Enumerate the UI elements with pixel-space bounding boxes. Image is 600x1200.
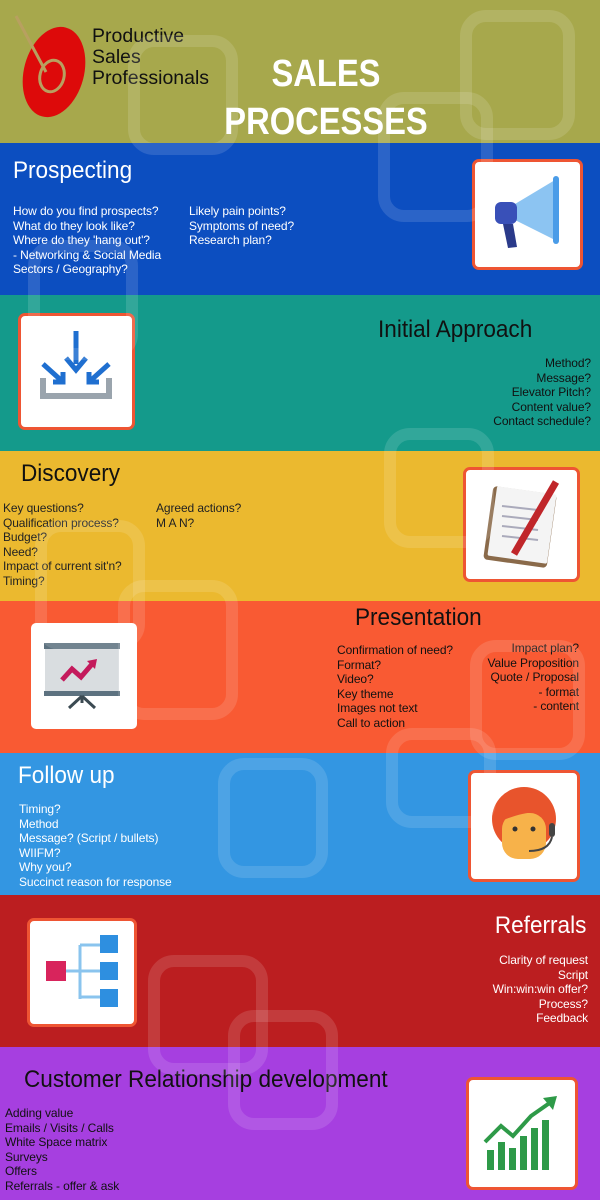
text (19, 802, 172, 888)
icon: growth chart (466, 1077, 578, 1190)
text: Message? (536, 370, 591, 384)
text: M A N? (156, 516, 194, 530)
text: Referrals - offer & ask (5, 1178, 119, 1192)
text: Feedback (536, 1011, 588, 1025)
text: Offers (5, 1164, 37, 1178)
text: Format? (337, 658, 381, 672)
text: - Networking & Social Media (13, 248, 161, 262)
text: Win:win:win offer? (493, 982, 588, 996)
text: Key questions? (3, 501, 84, 515)
text: Confirmation of need? (337, 643, 453, 657)
text: What do they look like? (13, 218, 135, 232)
text: White Space matrix (5, 1135, 107, 1149)
section: header (0, 0, 600, 143)
title: SALES (272, 53, 380, 95)
text: Video? (337, 672, 374, 686)
text: Quote / Proposal (491, 670, 579, 684)
text (5, 1106, 120, 1192)
title: PROCESSES (224, 101, 428, 143)
icon: support agent (468, 770, 580, 882)
logo: Professionals (92, 67, 209, 89)
text: Value Proposition (488, 656, 579, 670)
section: initial approach (0, 295, 600, 451)
text: Need? (3, 544, 38, 558)
text (493, 356, 591, 428)
logo: Sales (92, 46, 141, 68)
heading: Prospecting (13, 157, 132, 184)
text: Call to action (337, 716, 405, 730)
heading: Follow up (18, 762, 115, 789)
heading: Initial Approach (378, 316, 532, 343)
text (156, 501, 241, 530)
section: discovery (0, 451, 600, 601)
text: Images not text (337, 701, 418, 715)
text: Qualification process? (3, 516, 119, 530)
icon: presentation board (31, 623, 137, 729)
text: Likely pain points? (189, 204, 286, 218)
section: follow up (0, 753, 600, 895)
text: Adding value (5, 1106, 73, 1120)
text: - format (538, 684, 579, 698)
icon: hierarchy (27, 918, 137, 1027)
text: Research plan? (189, 233, 272, 247)
heading: Discovery (21, 460, 120, 487)
text: Elevator Pitch? (512, 385, 591, 399)
text (488, 641, 579, 713)
text (492, 953, 588, 1025)
text: Contact schedule? (493, 414, 591, 428)
text: Agreed actions? (156, 501, 241, 515)
icon: inbox (18, 313, 135, 430)
title (224, 53, 428, 143)
text: Where do they 'hang out'? (13, 233, 150, 247)
text: Method? (545, 356, 591, 370)
text (3, 501, 122, 588)
text (13, 204, 162, 276)
section: customer relationship (0, 1047, 600, 1200)
text (337, 643, 453, 730)
text: Clarity of request (499, 953, 588, 967)
text: WIIFM? (19, 846, 60, 860)
text: How do you find prospects? (13, 204, 158, 218)
text: Timing? (3, 574, 45, 588)
heading: Presentation (355, 604, 482, 631)
heading: Referrals (494, 912, 586, 939)
logo: Productive (92, 25, 184, 47)
text: Message? (Script / bullets) (19, 831, 158, 845)
text (189, 204, 294, 247)
text: Timing? (19, 802, 61, 816)
text: Budget? (3, 530, 47, 544)
decorative rounded squares (128, 35, 238, 155)
logo (15, 16, 209, 118)
text: Content value? (512, 400, 591, 414)
icon: notepad (463, 467, 580, 582)
icon: megaphone (472, 159, 583, 270)
text: Sectors / Geography? (13, 262, 128, 276)
text: Key theme (337, 686, 393, 700)
text: Succinct reason for response (19, 874, 172, 888)
text: - content (533, 699, 579, 713)
text: Method (19, 816, 58, 830)
text: Surveys (5, 1150, 48, 1164)
section: referrals (0, 895, 600, 1047)
text: Script (558, 968, 588, 982)
text: Process? (539, 996, 588, 1010)
heading: Customer Relationship development (24, 1066, 388, 1093)
text: Impact of current sit'n? (3, 559, 122, 573)
text: Impact plan? (511, 641, 579, 655)
text: Emails / Visits / Calls (5, 1120, 114, 1134)
text: Symptoms of need? (189, 218, 294, 232)
section: prospecting (0, 143, 600, 295)
section: presentation (0, 601, 600, 753)
text: Why you? (19, 860, 72, 874)
